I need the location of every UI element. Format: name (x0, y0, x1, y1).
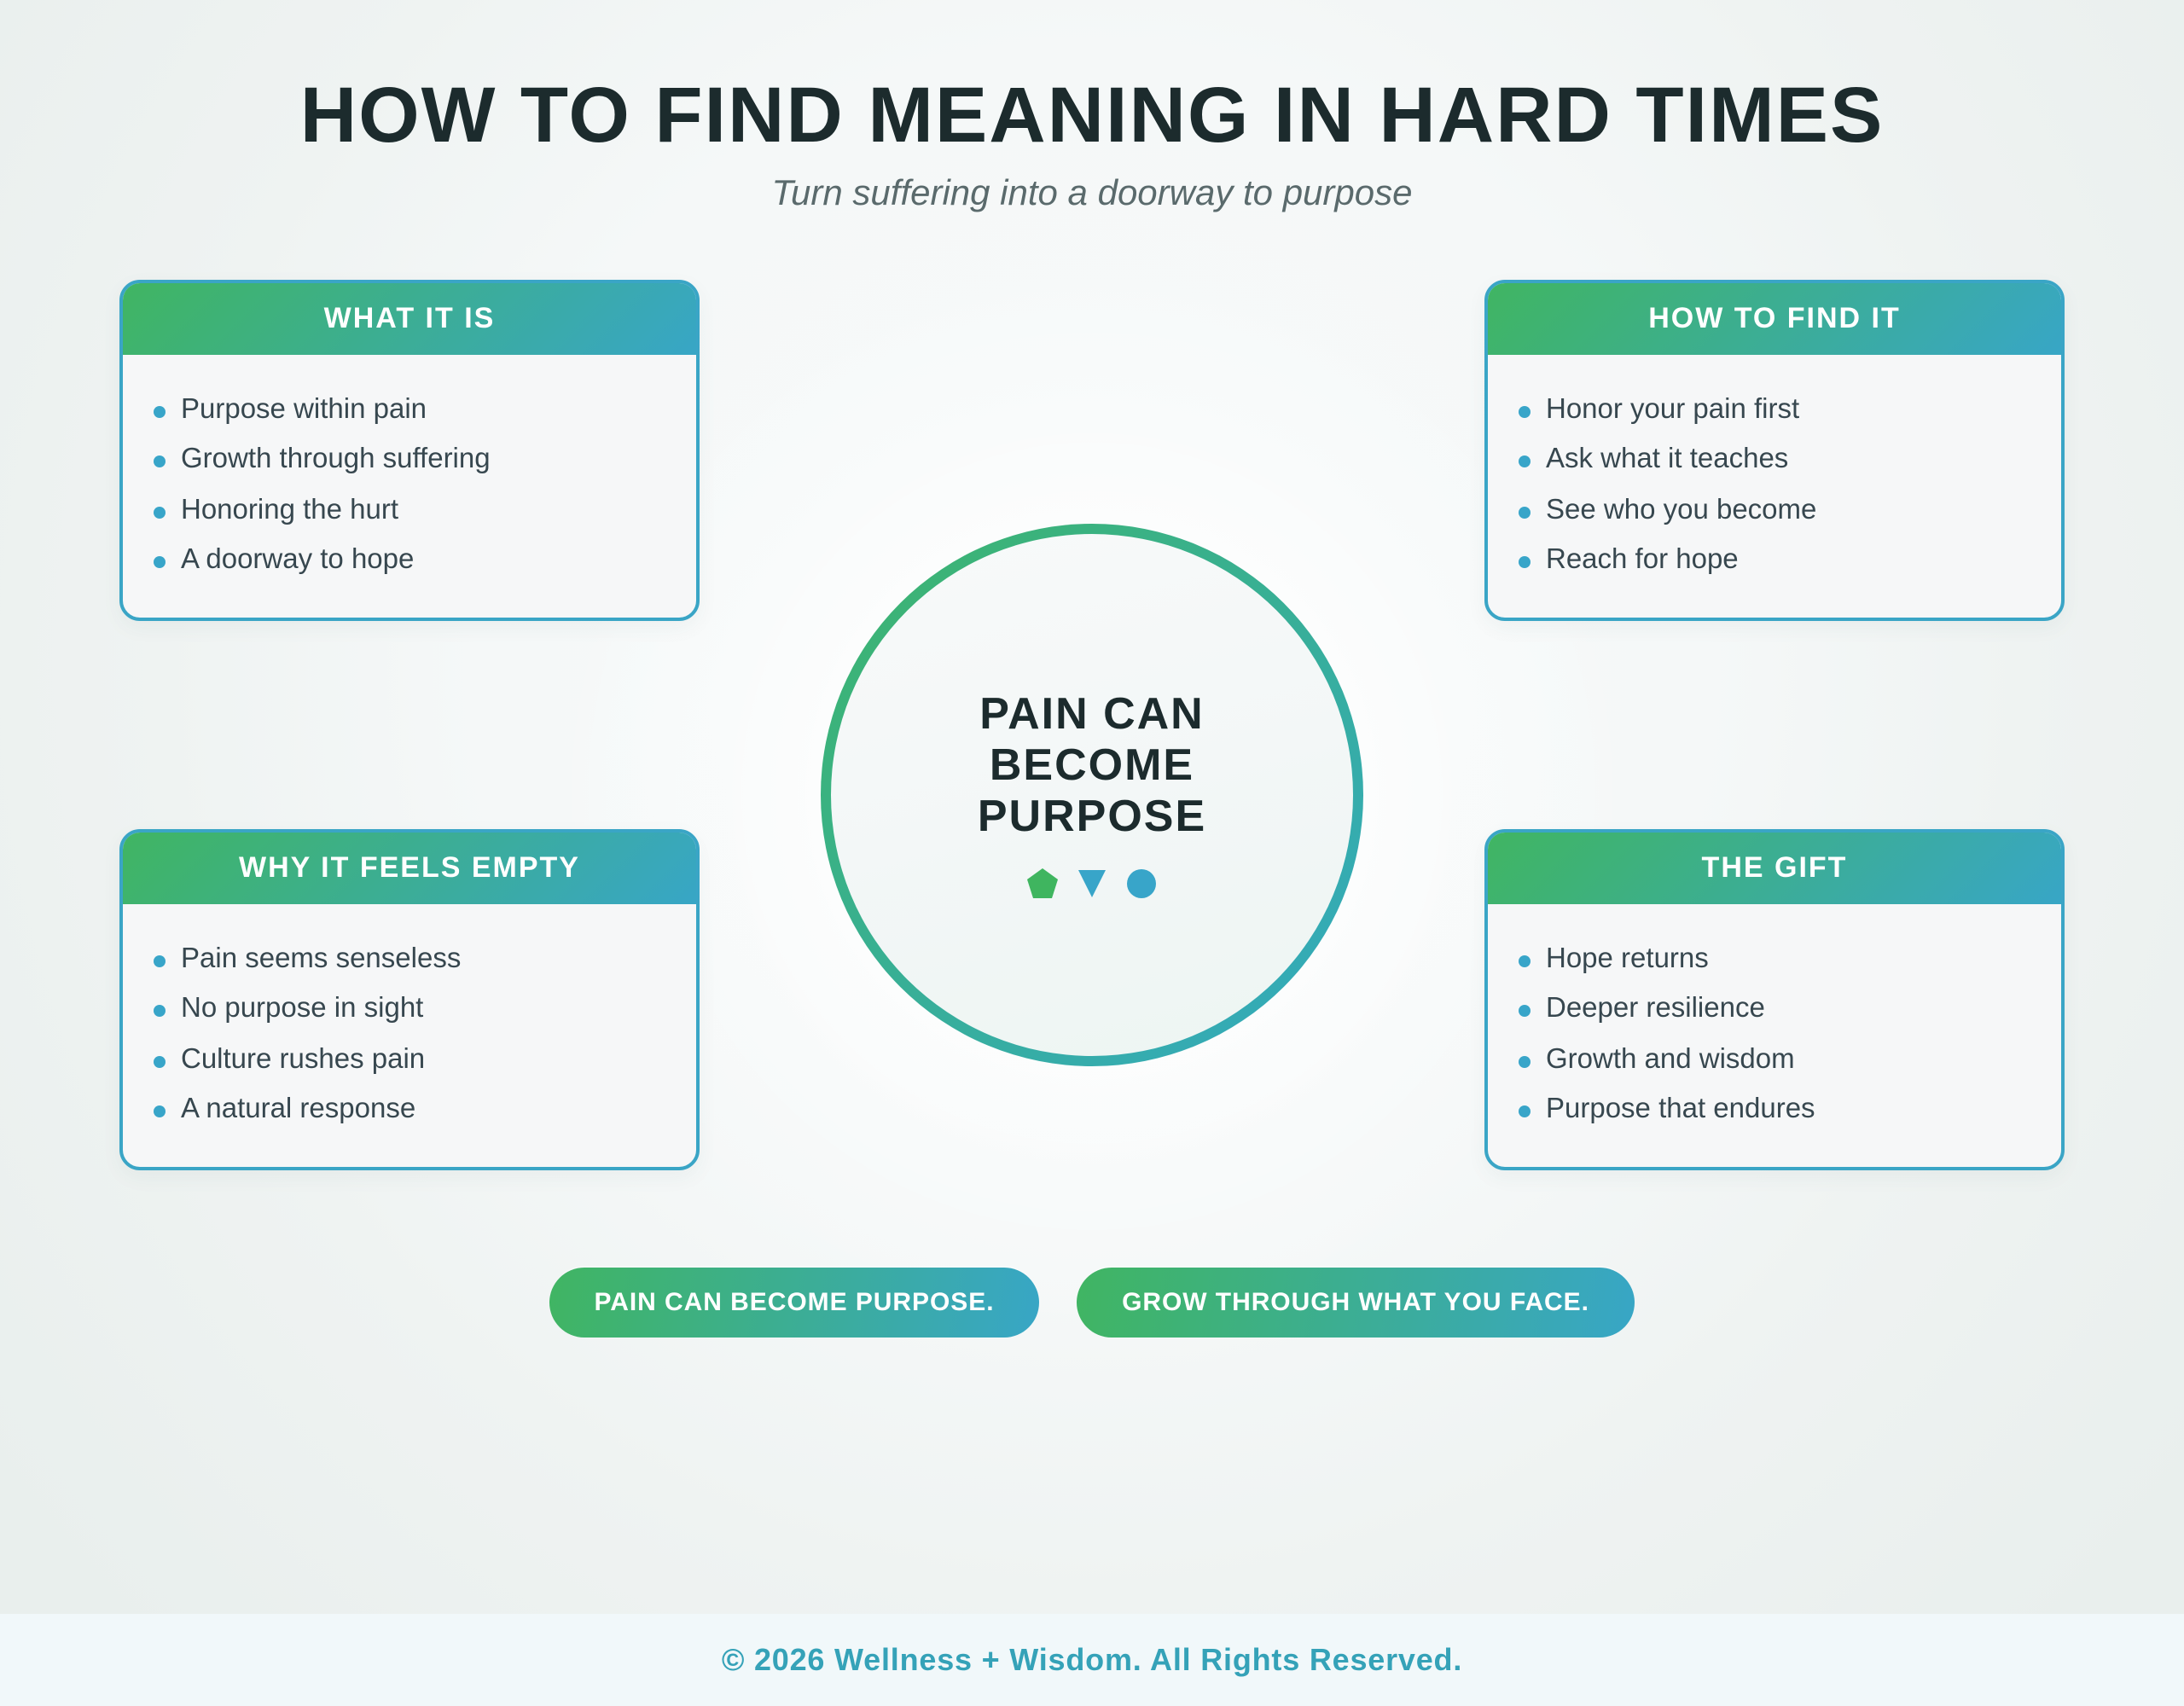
heading: why it feels empty: WHY IT FEELS EMPTY (239, 851, 580, 884)
list item: Honor your pain first (1546, 392, 1799, 424)
icon: pentagon (1027, 868, 1058, 899)
callout pill: pain can become purpose: PAIN CAN BECOME PURPOSE. (595, 1288, 994, 1316)
list item: Honoring the hurt (181, 493, 398, 525)
heading: what it is (123, 283, 696, 355)
panel: the gift (1484, 829, 2065, 1170)
panel: what it is (119, 280, 700, 621)
panel: why it feels empty (119, 829, 700, 1170)
list item: Purpose that endures (1546, 1092, 1815, 1123)
circle text: BECOME (990, 740, 1194, 790)
list item: Deeper resilience (1546, 991, 1765, 1023)
list item: See who you become (1546, 493, 1816, 525)
heading: how to find it (1488, 283, 2061, 355)
central circle (821, 524, 1363, 1066)
heading: the gift (1488, 833, 2061, 904)
circle text: PURPOSE (978, 792, 1206, 841)
list item: Culture rushes pain (181, 1042, 425, 1074)
icon: triangle (1078, 870, 1106, 897)
subtitle: Turn suffering into a doorway to purpose (771, 172, 1412, 212)
heading: what it is: WHAT IT IS (324, 302, 495, 334)
heading: why it feels empty (123, 833, 696, 904)
list item: Reach for hope (1546, 543, 1739, 574)
title: HOW TO FIND MEANING IN HARD TIMES (300, 72, 1884, 159)
footer: © 2026 Wellness + Wisdom. All Rights Reserved. (722, 1642, 1462, 1677)
list item: Pain seems senseless (181, 942, 461, 973)
list item: No purpose in sight (181, 991, 423, 1023)
list item: Purpose within pain (181, 392, 427, 424)
list item: A doorway to hope (181, 543, 414, 574)
callout pill: grow through what you face (1077, 1268, 1635, 1338)
circle text (821, 688, 1363, 842)
panel: how to find it (1484, 280, 2065, 621)
callout pill: pain can become purpose (549, 1268, 1039, 1338)
list item: Growth and wisdom (1546, 1042, 1795, 1074)
list item: Hope returns (1546, 942, 1709, 973)
circle text: PAIN CAN (979, 689, 1205, 739)
callout pill: grow through what you face: GROW THROUGH WHAT YOU FACE. (1122, 1288, 1589, 1316)
icon: circle (1127, 869, 1156, 898)
list item: Growth through suffering (181, 442, 491, 473)
list item: A natural response (181, 1092, 415, 1123)
heading: how to find it: HOW TO FIND IT (1648, 302, 1901, 334)
list item: Ask what it teaches (1546, 442, 1788, 473)
heading: the gift: THE GIFT (1702, 851, 1847, 884)
footer (0, 1614, 2184, 1706)
